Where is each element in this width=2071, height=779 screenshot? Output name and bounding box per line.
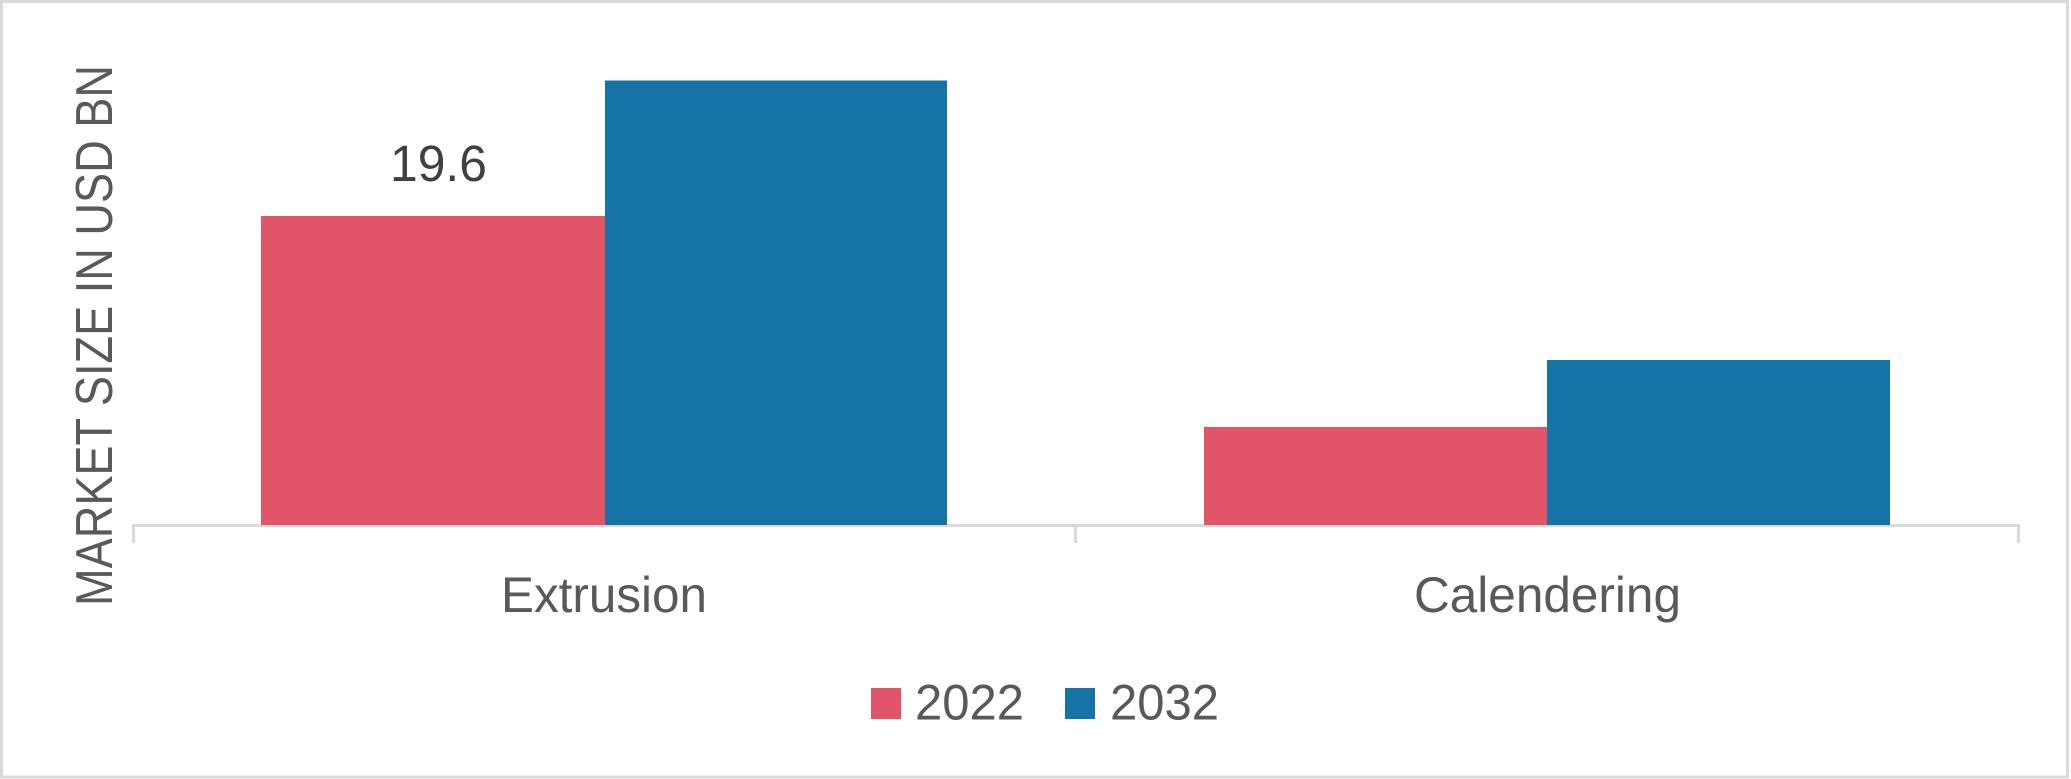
bar: Extrusion 2032: [605, 80, 947, 525]
category label: Calendering: Calendering: [1414, 567, 1681, 623]
legend swatch: 2032: [1065, 688, 1095, 719]
bars: Extrusion: [261, 80, 947, 525]
legend swatch: 2022: [871, 688, 901, 719]
bar: Calendering 2032: [1547, 360, 1890, 525]
x axis line with ticks: [132, 524, 2020, 543]
bars: Calendering: [1204, 360, 1890, 525]
data label: 19.6: 19.6: [390, 135, 487, 192]
legend label: 2032: 2032: [1110, 674, 1219, 730]
bar: Extrusion 2022: [261, 216, 605, 525]
legend: [871, 674, 1219, 730]
category label: Extrusion: Extrusion: [501, 567, 707, 623]
y-axis title: MARKET SIZE IN USD BN: [66, 65, 124, 606]
bar: Calendering 2022: [1204, 427, 1547, 525]
legend label: 2022: 2022: [915, 674, 1024, 730]
